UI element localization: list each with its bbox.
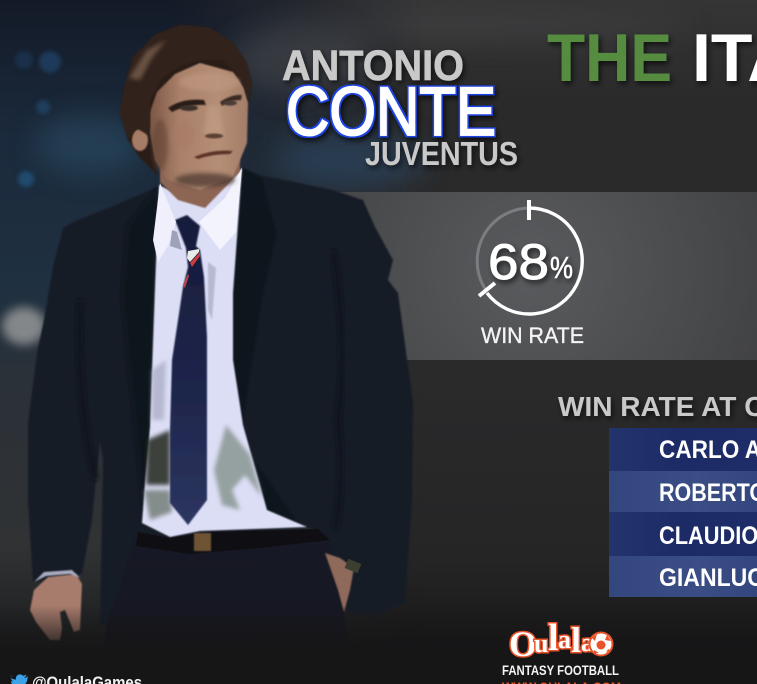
hand in pocket [325,553,354,612]
row: Ranieri [609,512,757,556]
logo wordmark: O [509,624,537,664]
eyes and brows [168,95,242,112]
neck [160,150,240,208]
row: Mancini [609,471,757,512]
nose [204,106,224,139]
tick marks [479,200,529,296]
portrait: Antonio Conte [28,25,413,684]
face [150,63,248,190]
left stadium backdrop [0,0,426,606]
collar [153,168,242,262]
hair highlight [129,40,166,80]
logo wordmark: a [558,625,571,654]
belt [136,529,330,554]
donut value arc [487,208,582,314]
bottom vignette [30,608,82,642]
hair front [120,25,252,140]
hair back [120,45,252,176]
logo wordmark: a [581,628,594,657]
name: Conte: CONTE [286,73,496,150]
row: Gianluca [609,556,757,597]
heading: THE ITA: THE [547,20,672,96]
table of managers [609,428,757,597]
shirt shadows [144,262,262,520]
face shading [152,73,240,187]
win rate donut [477,200,584,348]
panel: win rate band [330,192,757,360]
logo football [588,632,614,656]
logo wordmark: l [571,620,581,660]
value 68%: 68 [488,234,549,290]
logo: Oulala [502,617,621,684]
donut track [477,208,529,291]
tie [170,215,207,525]
club: Juventus: JUVENTUS [365,135,518,172]
ear [132,129,148,151]
logo wordmark: u [534,629,548,658]
left hand [30,574,82,640]
jacket and body [28,168,413,625]
name: Antonio: ANTONIO [282,42,464,90]
social handle [10,673,142,684]
mouth [194,151,233,159]
value 68%: % [550,250,573,285]
row: Ancelotti [609,428,757,471]
background [238,0,757,580]
logo wordmark: l [548,617,559,659]
shirt [142,168,307,537]
logo tagline: FANTASY FOOTBALL [502,662,619,678]
jacket lapels and folds [79,168,342,530]
trousers [136,537,342,622]
label: win rate: WIN RATE [481,323,584,348]
icon: twitter bird [10,674,28,684]
shirt cuff [34,570,80,582]
